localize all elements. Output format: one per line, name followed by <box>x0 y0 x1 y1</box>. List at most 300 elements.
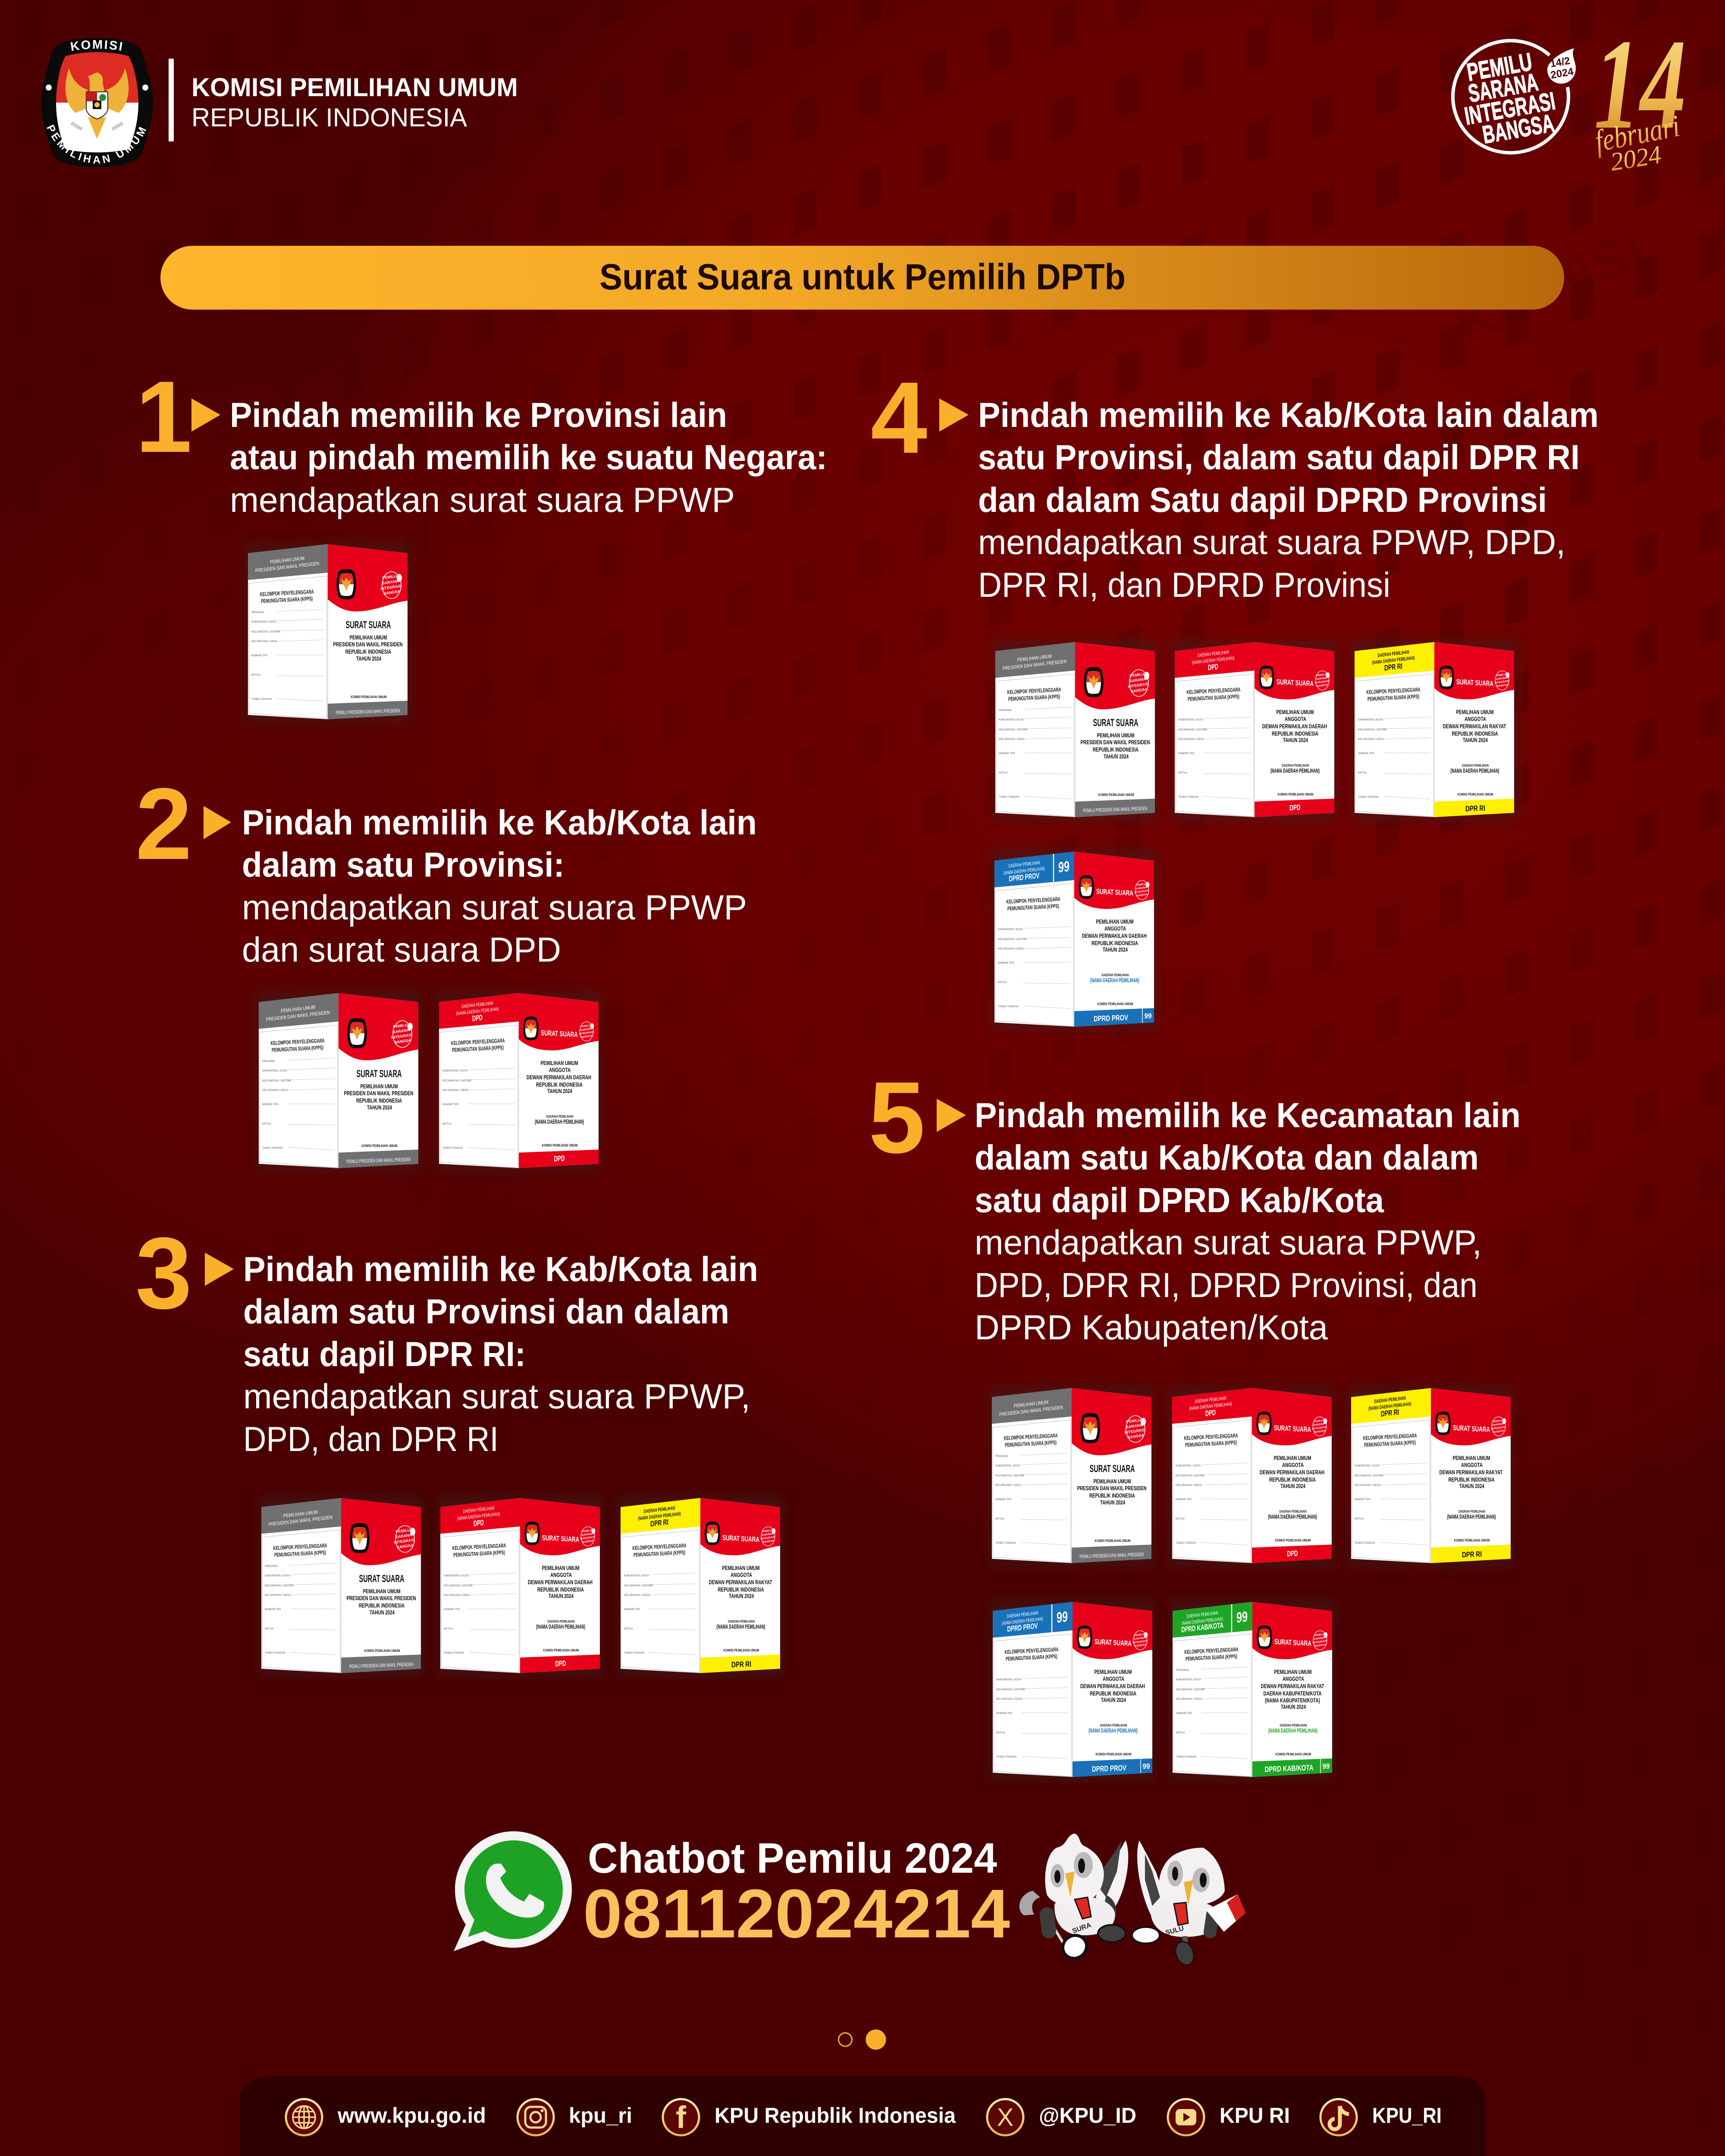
mascot: left: SURA <box>1071 1921 1092 1935</box>
ballot: DPD: DAERAH PEMILIHAN <box>463 1506 494 1514</box>
ballot: DPD: (NAMA DAERAH PEMILIHAN) <box>1189 1401 1232 1412</box>
ballot: DPR RI: DPR RI <box>731 1660 751 1669</box>
section 1 <box>135 360 827 723</box>
arrow 4 <box>939 398 969 432</box>
ballot: DPR RI: BANGSA <box>762 1539 775 1544</box>
ballot: DPR RI: SARANA <box>1492 1422 1504 1427</box>
ballot: DPR RI: DEWAN PERWAKILAN RAKYAT <box>1440 1469 1503 1476</box>
ballot: DPD: REPUBLIK INDONESIA <box>1269 1476 1316 1483</box>
ballot: DPRD Prov: KOMISI PEMILIHAN UMUM <box>1097 1002 1133 1006</box>
ballot: PPWP: KELURAHAN / DESA <box>262 1089 289 1092</box>
ballot: DPR RI: NOMOR TPS <box>1355 1498 1371 1501</box>
ballot: DPR RI: NOMOR TPS <box>624 1608 640 1611</box>
ballot: PPWP: KELURAHAN / DESA <box>999 738 1025 741</box>
ballot: PPWP: INTEGRASI <box>1128 682 1149 689</box>
ballot: PPWP <box>256 991 421 1172</box>
ballot: DPRD Kab/Kota: PROVINSI <box>1176 1669 1189 1672</box>
ballot: PPWP: SARANA <box>1129 677 1146 683</box>
pagination dots <box>838 2029 886 2050</box>
ballot: PPWP: KETUA <box>999 771 1008 774</box>
ballot: PPWP: TAHUN 2024 <box>1100 1499 1125 1506</box>
ballot: DPR RI: TANDA TANGAN <box>1358 796 1378 799</box>
text 1: mendapatkan surat suara PPWP <box>230 481 735 520</box>
ballot: PPWP: PEMILIHAN UMUM <box>349 634 387 641</box>
tagline logo: SARANA <box>1466 68 1540 108</box>
ballot: DPD: KOMISI PEMILIHAN UMUM <box>1275 1538 1311 1542</box>
ballot: PPWP: PRESIDEN DAN WAKIL PRESIDEN <box>347 1595 416 1601</box>
ballot: DPRD Kab/Kota: PEMILIHAN UMUM <box>1274 1668 1312 1675</box>
icon: flag <box>1206 1894 1245 1932</box>
ballot: DPR RI: SARANA <box>762 1532 773 1537</box>
ballot: DPRD Prov: 99 <box>1057 1608 1068 1626</box>
KPU logo <box>41 38 153 167</box>
ballot: PPWP: INTEGRASI <box>1124 1428 1146 1435</box>
ballot: PPWP: KELOMPOK PENYELENGGARA <box>1004 1432 1058 1442</box>
ballot: PPWP: REPUBLIK INDONESIA <box>1089 1492 1135 1499</box>
ballot: DPD: KETUA <box>444 1627 453 1630</box>
ballot: PPWP <box>993 640 1157 821</box>
ballot: PPWP: PEMILIHAN UMUM <box>281 1005 315 1014</box>
ballot: PPWP: REPUBLIK INDONESIA <box>1093 746 1138 753</box>
ballot: PPWP: INTEGRASI <box>394 1538 415 1545</box>
label: facebook: KPU Republik Indonesia <box>715 2103 956 2128</box>
tagline logo: INTEGRASI <box>1462 87 1557 130</box>
ballot: DPR RI: PEMUNGUTAN SUARA (KPPS) <box>1364 1439 1416 1448</box>
ballot: DPD: REPUBLIK INDONESIA <box>1272 730 1318 737</box>
tagline logo: PEMILU <box>1465 47 1534 87</box>
ballot: DPRD Kab/Kota: (NAMA DAERAH PEMILIHAN) <box>1268 1727 1317 1734</box>
ballot: PPWP: NOMOR TPS <box>995 1498 1011 1501</box>
ballot: DPD: PEMUNGUTAN SUARA (KPPS) <box>452 1044 504 1053</box>
ballot: DPR RI: DAERAH PEMILIHAN <box>728 1619 755 1623</box>
ballot: PPWP: SURAT SUARA <box>1093 717 1138 729</box>
ballot: DPD: KOMISI PEMILIHAN UMUM <box>543 1648 579 1652</box>
ballot: DPD: TANDA TANGAN <box>1176 1542 1196 1545</box>
ballot: PPWP: KABUPATEN / KOTA <box>999 718 1024 721</box>
ballot: DPRD Kab/Kota: KOMISI PEMILIHAN UMUM <box>1276 1752 1311 1756</box>
ballot: DPR RI: DPR RI <box>1384 662 1402 672</box>
text 4: Pindah memilih ke Kab/Kota lain dalam <box>978 396 1599 435</box>
ballot: PPWP: TANDA TANGAN <box>262 1147 282 1150</box>
text 1: Pindah memilih ke Provinsi lain <box>230 396 727 435</box>
ballot: DPRD Kab/Kota: SARANA <box>1314 1636 1325 1641</box>
ballot: DPD: DAERAH PEMILIHAN <box>1197 650 1229 658</box>
ballot: DPD: DEWAN PERWAKILAN DAERAH <box>528 1579 593 1586</box>
ballot: DPD: DPD <box>555 1659 566 1668</box>
ballot: PPWP: PRESIDEN DAN WAKIL PRESIDEN <box>1003 659 1066 671</box>
ballot: DPRD Prov: KABUPATEN / KOTA <box>996 1678 1022 1681</box>
ballot: DPR RI: TANDA TANGAN <box>624 1651 644 1655</box>
ballot: DPD: DPD <box>554 1154 565 1163</box>
ballot: DPD: (NAMA DAERAH PEMILIHAN) <box>535 1118 584 1125</box>
text 5: mendapatkan surat suara PPWP, <box>975 1223 1482 1262</box>
ballot: DPR RI: KELOMPOK PENYELENGGARA <box>1363 1432 1417 1442</box>
ballot: DPRD Prov: 99 <box>1143 1762 1150 1771</box>
ballot: PPWP: KELOMPOK PENYELENGGARA <box>260 588 314 598</box>
ballot: DPR RI: TAHUN 2024 <box>729 1592 754 1599</box>
ballot: PPWP: PRESIDEN DAN WAKIL PRESIDEN <box>266 1010 330 1022</box>
ballot: DPRD Prov: NOMOR TPS <box>996 1712 1012 1715</box>
ballot: PPWP: SARANA <box>392 1028 410 1034</box>
ballot: DPD: KOMISI PEMILIHAN UMUM <box>542 1143 578 1147</box>
ballot: DPRD Prov: DEWAN PERWAKILAN DAERAH <box>1080 1683 1145 1689</box>
ballot: DPRD Prov: DAERAH PEMILIHAN <box>1009 860 1040 869</box>
ballot: DPR RI: KELOMPOK PENYELENGGARA <box>1366 686 1421 696</box>
ballot: DPRD Kab/Kota: PEMUNGUTAN SUARA (KPPS) <box>1186 1653 1237 1662</box>
ballot: DPD: PEMILU <box>1313 1419 1324 1423</box>
ballot: DPRD Prov: BANGSA <box>1135 1643 1147 1648</box>
header title: KOMISI PEMILIHAN UMUM <box>191 73 518 102</box>
ballot: DPR RI: KABUPATEN / KOTA <box>624 1574 649 1577</box>
ballot: DPRD Kab/Kota: DAERAH PEMILIHAN <box>1187 1611 1218 1619</box>
chatbot title: Chatbot Pemilu 2024 <box>588 1834 997 1882</box>
ballot: DPRD Kab/Kota: DEWAN PERWAKILAN RAKYAT <box>1261 1683 1324 1689</box>
ballot: DPRD Prov: 99 <box>1058 858 1070 876</box>
text 3: mendapatkan surat suara PPWP, <box>243 1377 750 1416</box>
ballot: DPD <box>438 1496 602 1677</box>
ballot: DPD: TAHUN 2024 <box>549 1592 574 1599</box>
text 3: satu dapil DPR RI: <box>243 1335 526 1374</box>
ballot: PPWP: SARANA <box>1126 1423 1143 1429</box>
ballot: DPRD Kab/Kota: TANDA TANGAN <box>1176 1755 1196 1758</box>
icon: instagram <box>518 2099 554 2135</box>
ballot: DPR RI: KABUPATEN / KOTA <box>1355 1464 1380 1467</box>
ballot: DPD: DAERAH PEMILIHAN <box>1279 1509 1307 1514</box>
header divider <box>169 59 174 141</box>
ballot: DPR RI: TANDA TANGAN <box>1355 1542 1375 1545</box>
ballot: DPR RI: TAHUN 2024 <box>1459 1482 1484 1489</box>
number 1: 1 <box>135 360 192 474</box>
ballot: DPD: DEWAN PERWAKILAN DAERAH <box>1260 1469 1324 1476</box>
ballot: DPR RI: ANGGOTA <box>1461 1461 1483 1468</box>
ballot: DPR RI: KOMISI PEMILIHAN UMUM <box>1458 792 1493 796</box>
ballot: DPR RI: DPR RI <box>1462 1550 1482 1559</box>
ballot: DPR RI: SURAT SUARA <box>722 1534 759 1544</box>
arrow 1 <box>191 398 220 432</box>
ballot: PPWP: PEMILU PRESIDEN DAN WAKIL PRESIDEN <box>349 1662 414 1670</box>
ballot: PPWP: PRESIDEN DAN WAKIL PRESIDEN <box>269 1515 332 1527</box>
ballot: PPWP: PRESIDEN DAN WAKIL PRESIDEN <box>1081 739 1150 746</box>
ballot: DPD: DAERAH PEMILIHAN <box>1282 763 1309 768</box>
ballot: DPRD Prov: DPRD PROV <box>1009 871 1040 883</box>
ballot: PPWP: PEMILIHAN UMUM <box>1097 732 1134 739</box>
ballot: DPD: DEWAN PERWAKILAN DAERAH <box>527 1074 591 1081</box>
ballot: DPD: REPUBLIK INDONESIA <box>537 1586 584 1593</box>
ballot: DPD: SURAT SUARA <box>541 1029 578 1039</box>
ballot: DPRD Prov: (NAMA DAERAH PEMILIHAN) <box>1002 1617 1043 1626</box>
ballot: DPRD Prov: TAHUN 2024 <box>1101 1696 1126 1703</box>
ballot: DPD: PEMUNGUTAN SUARA (KPPS) <box>1185 1439 1237 1448</box>
ballot: DPD: DAERAH PEMILIHAN <box>546 1114 574 1119</box>
ballot: DPR RI: ANGGOTA <box>1465 715 1486 722</box>
tagline logo: 14/2 <box>1549 55 1571 70</box>
ballot: PPWP: NOMOR TPS <box>262 1103 278 1106</box>
ballot: DPD: PEMILU <box>580 1024 591 1028</box>
ballot: PPWP <box>259 1496 423 1677</box>
ballot: PPWP: KECAMATAN / DISTRIK <box>999 728 1028 731</box>
logo: 14 februari 2024 <box>1592 13 1686 176</box>
ballot: PPWP: PRESIDEN DAN WAKIL PRESIDEN <box>999 1405 1063 1417</box>
ballot: DPRD Kab/Kota: 99 <box>1236 1608 1248 1626</box>
ballot: DPR RI: DEWAN PERWAKILAN RAKYAT <box>1443 723 1506 730</box>
ballot: DPRD Prov <box>992 850 1157 1030</box>
ballot: DPD: ANGGOTA <box>1285 715 1306 722</box>
ballot: PPWP: KELURAHAN / DESA <box>251 640 278 643</box>
ballot: DPD: KECAMATAN / DISTRIK <box>442 1079 472 1082</box>
ballot: DPD: NOMOR TPS <box>1178 752 1194 755</box>
icon: web <box>286 2099 322 2135</box>
ballot: PPWP: SARANA <box>382 579 399 586</box>
ballot: PPWP: BANGSA <box>394 1038 411 1045</box>
text 2: Pindah memilih ke Kab/Kota lain <box>242 803 757 842</box>
text 3: DPD, dan DPR RI <box>243 1420 499 1459</box>
ballot: PPWP: KOMISI PEMILIHAN UMUM <box>351 695 386 699</box>
label: X: @KPU_ID <box>1039 2103 1136 2128</box>
footer bar <box>239 2077 1486 2156</box>
ballot: DPD <box>1170 1386 1334 1567</box>
ballot: DPRD Prov: KELURAHAN / DESA <box>998 947 1024 950</box>
ballot: DPD: ANGGOTA <box>1282 1461 1304 1468</box>
text 4: satu Provinsi, dalam satu dapil DPR RI <box>978 438 1580 477</box>
ballot: PPWP: KETUA <box>265 1627 274 1630</box>
ballot: PPWP: PEMUNGUTAN SUARA (KPPS) <box>1005 1439 1057 1448</box>
ballot: PPWP: KELOMPOK PENYELENGGARA <box>273 1542 327 1551</box>
number 4: 4 <box>871 361 927 475</box>
ballot: DPR RI: DPR RI <box>1465 804 1485 813</box>
ballot: DPD: PEMILIHAN UMUM <box>542 1564 580 1571</box>
ballot: DPD: SARANA <box>580 1027 592 1032</box>
ballot: DPD: BANGSA <box>1317 683 1329 688</box>
ballot: DPRD Prov: INTEGRASI <box>1133 1639 1148 1645</box>
text 5: DPRD Kabupaten/Kota <box>975 1308 1328 1347</box>
ballot: DPD: KECAMATAN / DISTRIK <box>444 1584 473 1587</box>
arrow 3 <box>205 1253 234 1286</box>
ballot: DPD <box>1172 640 1337 821</box>
ballot: DPD <box>436 991 601 1172</box>
ballot: DPD: DAERAH PEMILIHAN <box>461 1001 493 1009</box>
ballot: DPD: SURAT SUARA <box>1276 678 1314 688</box>
ballot: PPWP: TANDA TANGAN <box>995 1542 1016 1545</box>
icon: facebook <box>663 2099 699 2135</box>
ballot: PPWP: PEMILU <box>393 1023 408 1029</box>
ballot: PPWP: BANGSA <box>396 1543 414 1550</box>
ballot: DPRD Prov: TAHUN 2024 <box>1103 946 1128 953</box>
KPU logo: KOMISI <box>69 38 125 54</box>
ballot: DPD: PEMILIHAN UMUM <box>541 1059 578 1066</box>
ballot: DPRD Kab/Kota: KECAMATAN / DISTRIK <box>1176 1688 1205 1691</box>
label: youtube: KPU RI <box>1220 2103 1290 2128</box>
mascot: right <box>1132 1840 1245 1968</box>
icon: X <box>987 2099 1023 2135</box>
text 2: dalam satu Provinsi: <box>242 846 565 884</box>
ballot: DPD: KELURAHAN / DESA <box>1176 1484 1202 1487</box>
text 1 <box>230 396 827 520</box>
ballot: DPR RI: DPR RI <box>650 1518 668 1528</box>
text 4: DPR RI, dan DPRD Provinsi <box>978 566 1390 605</box>
ballot: DPR RI: PEMUNGUTAN SUARA (KPPS) <box>1367 693 1419 702</box>
ballot: PPWP: TAHUN 2024 <box>1104 753 1129 760</box>
ballot: DPRD Kab/Kota: ANGGOTA <box>1283 1675 1304 1682</box>
ballot: PPWP: SURAT SUARA <box>346 619 391 631</box>
ballot: PPWP: PEMUNGUTAN SUARA (KPPS) <box>1008 693 1060 702</box>
ballot: DPR RI: TAHUN 2024 <box>1463 736 1488 743</box>
text 5: dalam satu Kab/Kota dan dalam <box>975 1138 1479 1177</box>
ballot: DPD: SURAT SUARA <box>1274 1424 1311 1434</box>
title banner <box>160 246 1564 310</box>
ballot: DPD: BANGSA <box>581 1034 593 1039</box>
ballot: PPWP: KABUPATEN / KOTA <box>251 620 277 624</box>
number 2: 2 <box>135 767 192 881</box>
label: website: www.kpu.go.id <box>337 2103 486 2128</box>
ballot: PPWP: PEMILU <box>382 574 397 580</box>
ballot: DPR RI: KELOMPOK PENYELENGGARA <box>632 1542 687 1551</box>
ballot: DPD: (NAMA DAERAH PEMILIHAN) <box>456 1006 499 1017</box>
ballot: DPD: PEMUNGUTAN SUARA (KPPS) <box>1188 693 1239 702</box>
ballot: DPRD Kab/Kota: TAHUN 2024 <box>1281 1703 1306 1710</box>
ballot: DPD: TANDA TANGAN <box>1178 796 1198 799</box>
ballot: DPRD Kab/Kota: KELOMPOK PENYELENGGARA <box>1184 1646 1239 1655</box>
ballot: PPWP: PRESIDEN DAN WAKIL PRESIDEN <box>344 1090 413 1097</box>
logo: 14 februari 2024: 14 <box>1594 13 1686 156</box>
ballot: DPD: KABUPATEN / KOTA <box>1178 718 1204 721</box>
ballot: DPRD Prov: SARANA <box>1134 1636 1145 1641</box>
section 5 <box>869 1061 1521 1780</box>
ballot: DPD: ANGGOTA <box>550 1571 572 1578</box>
section 4 <box>871 361 1599 1030</box>
ballot: DPR RI: PEMILU <box>1492 1419 1503 1423</box>
ballot: PPWP: KELOMPOK PENYELENGGARA <box>1007 686 1061 696</box>
ballot: PPWP: PEMILIHAN UMUM <box>270 556 304 565</box>
text 5: Pindah memilih ke Kecamatan lain <box>975 1096 1521 1135</box>
ballot: DPRD Prov: BANGSA <box>1136 893 1148 897</box>
ballot: DPD: (NAMA DAERAH PEMILIHAN) <box>1192 655 1235 666</box>
ballot: DPR RI: BANGSA <box>1496 683 1509 688</box>
ballot: DPD: NOMOR TPS <box>444 1608 460 1611</box>
ballot: DPD: DPD <box>1205 1408 1216 1418</box>
ballot: PPWP: KABUPATEN / KOTA <box>995 1464 1021 1467</box>
ballot: DPRD Kab/Kota: KETUA <box>1176 1731 1186 1734</box>
ballot: DPR RI <box>1352 640 1517 821</box>
ballot: PPWP: KETUA <box>262 1122 272 1125</box>
ballot: DPRD Kab/Kota: KABUPATEN / KOTA <box>1176 1678 1201 1681</box>
text 4 <box>978 396 1599 605</box>
ballot: DPRD Prov: PEMILU <box>1135 883 1146 887</box>
ballot: DPD: DPD <box>474 1518 484 1528</box>
ballot: PPWP: KELURAHAN / DESA <box>995 1484 1022 1487</box>
ballot: DPR RI: KELURAHAN / DESA <box>1358 738 1384 741</box>
ballot: PPWP: PROVINSI <box>265 1565 278 1568</box>
ballot: DPR RI: KETUA <box>1358 771 1367 774</box>
ballot: PPWP: SURAT SUARA <box>356 1068 402 1080</box>
ballot: PPWP: KOMISI PEMILIHAN UMUM <box>1095 1539 1131 1543</box>
ballot: DPD: SARANA <box>1313 1422 1325 1427</box>
ballot: DPR RI: SURAT SUARA <box>1456 678 1493 688</box>
text 3: Pindah memilih ke Kab/Kota lain <box>243 1250 758 1289</box>
ballot: PPWP: PEMILIHAN UMUM <box>283 1510 318 1519</box>
text 2: mendapatkan surat suara PPWP <box>242 888 747 927</box>
text 4: dan dalam Satu dapil DPRD Provinsi <box>978 481 1547 520</box>
ballot: PPWP: PEMILU <box>1126 1418 1141 1424</box>
ballot: DPR RI: KETUA <box>624 1627 634 1630</box>
ballot: DPRD Prov: DAERAH PEMILIHAN <box>1007 1611 1038 1619</box>
ballot: DPD: TAHUN 2024 <box>547 1087 572 1094</box>
ballot: DPRD Prov: ANGGOTA <box>1103 1675 1124 1682</box>
ballot: PPWP: KECAMATAN / DISTRIK <box>265 1584 294 1587</box>
ballot: DPRD Prov: DPRD PROV <box>1094 1013 1128 1023</box>
text 2 <box>242 803 757 969</box>
ballot: PPWP: TAHUN 2024 <box>370 1609 395 1616</box>
icon: WhatsApp <box>454 1831 572 1951</box>
ballot: DPD: KELURAHAN / DESA <box>1178 738 1204 741</box>
ballot: DPRD Prov: KELURAHAN / DESA <box>996 1698 1022 1701</box>
text 4: mendapatkan surat suara PPWP, DPD, <box>978 523 1565 562</box>
ballot: DPD: BANGSA <box>582 1539 594 1544</box>
mascot: left <box>1019 1833 1128 1963</box>
ballot: DPRD Prov: DAERAH PEMILIHAN <box>1100 1723 1127 1727</box>
ballot: DPRD Prov: INTEGRASI <box>1135 889 1149 894</box>
ballot: DPR RI <box>1349 1386 1513 1567</box>
tagline logo: BANGSA <box>1480 109 1556 149</box>
ballot: DPRD Kab/Kota: DAERAH KABUPATEN/KOTA <box>1264 1690 1321 1697</box>
ballot: PPWP <box>989 1386 1154 1567</box>
ballot: DPRD Kab/Kota: NOMOR TPS <box>1176 1712 1192 1715</box>
ballot: DPRD Kab/Kota: SURAT SUARA <box>1274 1638 1311 1648</box>
ballot: DPD: KOMISI PEMILIHAN UMUM <box>1277 792 1314 796</box>
ballot: DPD: TANDA TANGAN <box>444 1651 464 1655</box>
ballot: DPRD Kab/Kota: INTEGRASI <box>1313 1639 1327 1645</box>
ballot: DPRD Prov: (NAMA DAERAH PEMILIHAN) <box>1090 977 1139 984</box>
ballot: DPRD Prov: SARANA <box>1135 886 1147 890</box>
ballot: PPWP: PEMILU <box>1129 672 1145 678</box>
ballot: DPD: INTEGRASI <box>1312 1426 1327 1431</box>
ballot: PPWP: PEMILIHAN UMUM <box>1014 1400 1048 1409</box>
ballot: DPRD Kab/Kota: KELURAHAN / DESA <box>1176 1698 1202 1701</box>
arrow 2 <box>204 806 231 839</box>
ballot: DPR RI: REPUBLIK INDONESIA <box>718 1586 764 1593</box>
ballot: PPWP: PROVINSI <box>262 1060 275 1063</box>
ballot: DPD: DPD <box>1289 803 1301 812</box>
ballot: DPR RI: KELURAHAN / DESA <box>624 1594 650 1597</box>
ballot: PPWP: TANDA TANGAN <box>251 698 272 701</box>
ballot: PPWP: KOMISI PEMILIHAN UMUM <box>1098 793 1134 797</box>
ballot: DPRD Prov: KOMISI PEMILIHAN UMUM <box>1095 1752 1132 1756</box>
icon: facebook: f <box>676 2100 687 2135</box>
ballot: PPWP: PEMILU PRESIDEN DAN WAKIL PRESIDEN <box>346 1157 411 1165</box>
ballot: DPRD Prov: (NAMA DAERAH PEMILIHAN) <box>1004 866 1045 876</box>
ballot: DPD: (NAMA DAERAH PEMILIHAN) <box>457 1511 500 1522</box>
ballot: DPRD Kab/Kota: (NAMA DAERAH PEMILIHAN) <box>1182 1617 1223 1626</box>
background: KOMISI <box>1446 217 1653 356</box>
ballot: DPR RI: (NAMA DAERAH PEMILIHAN) <box>1447 1513 1496 1520</box>
ballot: DPD: TANDA TANGAN <box>442 1147 463 1150</box>
number 3: 3 <box>135 1216 192 1330</box>
ballot: PPWP: PEMILU PRESIDEN DAN WAKIL PRESIDEN <box>1083 806 1148 814</box>
ballot: DPD: KECAMATAN / DISTRIK <box>1176 1474 1205 1477</box>
ballot: DPRD Prov: KABUPATEN / KOTA <box>998 928 1023 931</box>
logo: 14 februari 2024: 2024 <box>1609 140 1663 176</box>
ballot: DPD: KETUA <box>1176 1517 1185 1520</box>
ballot: DPD: REPUBLIK INDONESIA <box>536 1081 583 1088</box>
ballot: DPR RI: (NAMA DAERAH PEMILIHAN) <box>717 1623 765 1630</box>
ballot: DPD: SURAT SUARA <box>542 1534 579 1544</box>
ballot: DPD: KELOMPOK PENYELENGGARA <box>1187 686 1241 696</box>
section 2 <box>135 767 757 1172</box>
ballot: PPWP: KABUPATEN / KOTA <box>265 1574 290 1577</box>
ballot: DPR RI: (NAMA DAERAH PEMILIHAN) <box>1372 655 1415 665</box>
ballot: DPRD Kab/Kota: DAERAH PEMILIHAN <box>1280 1723 1307 1727</box>
ballot: PPWP: PEMILIHAN UMUM <box>363 1588 400 1595</box>
ballot: DPR RI: ANGGOTA <box>731 1571 752 1578</box>
